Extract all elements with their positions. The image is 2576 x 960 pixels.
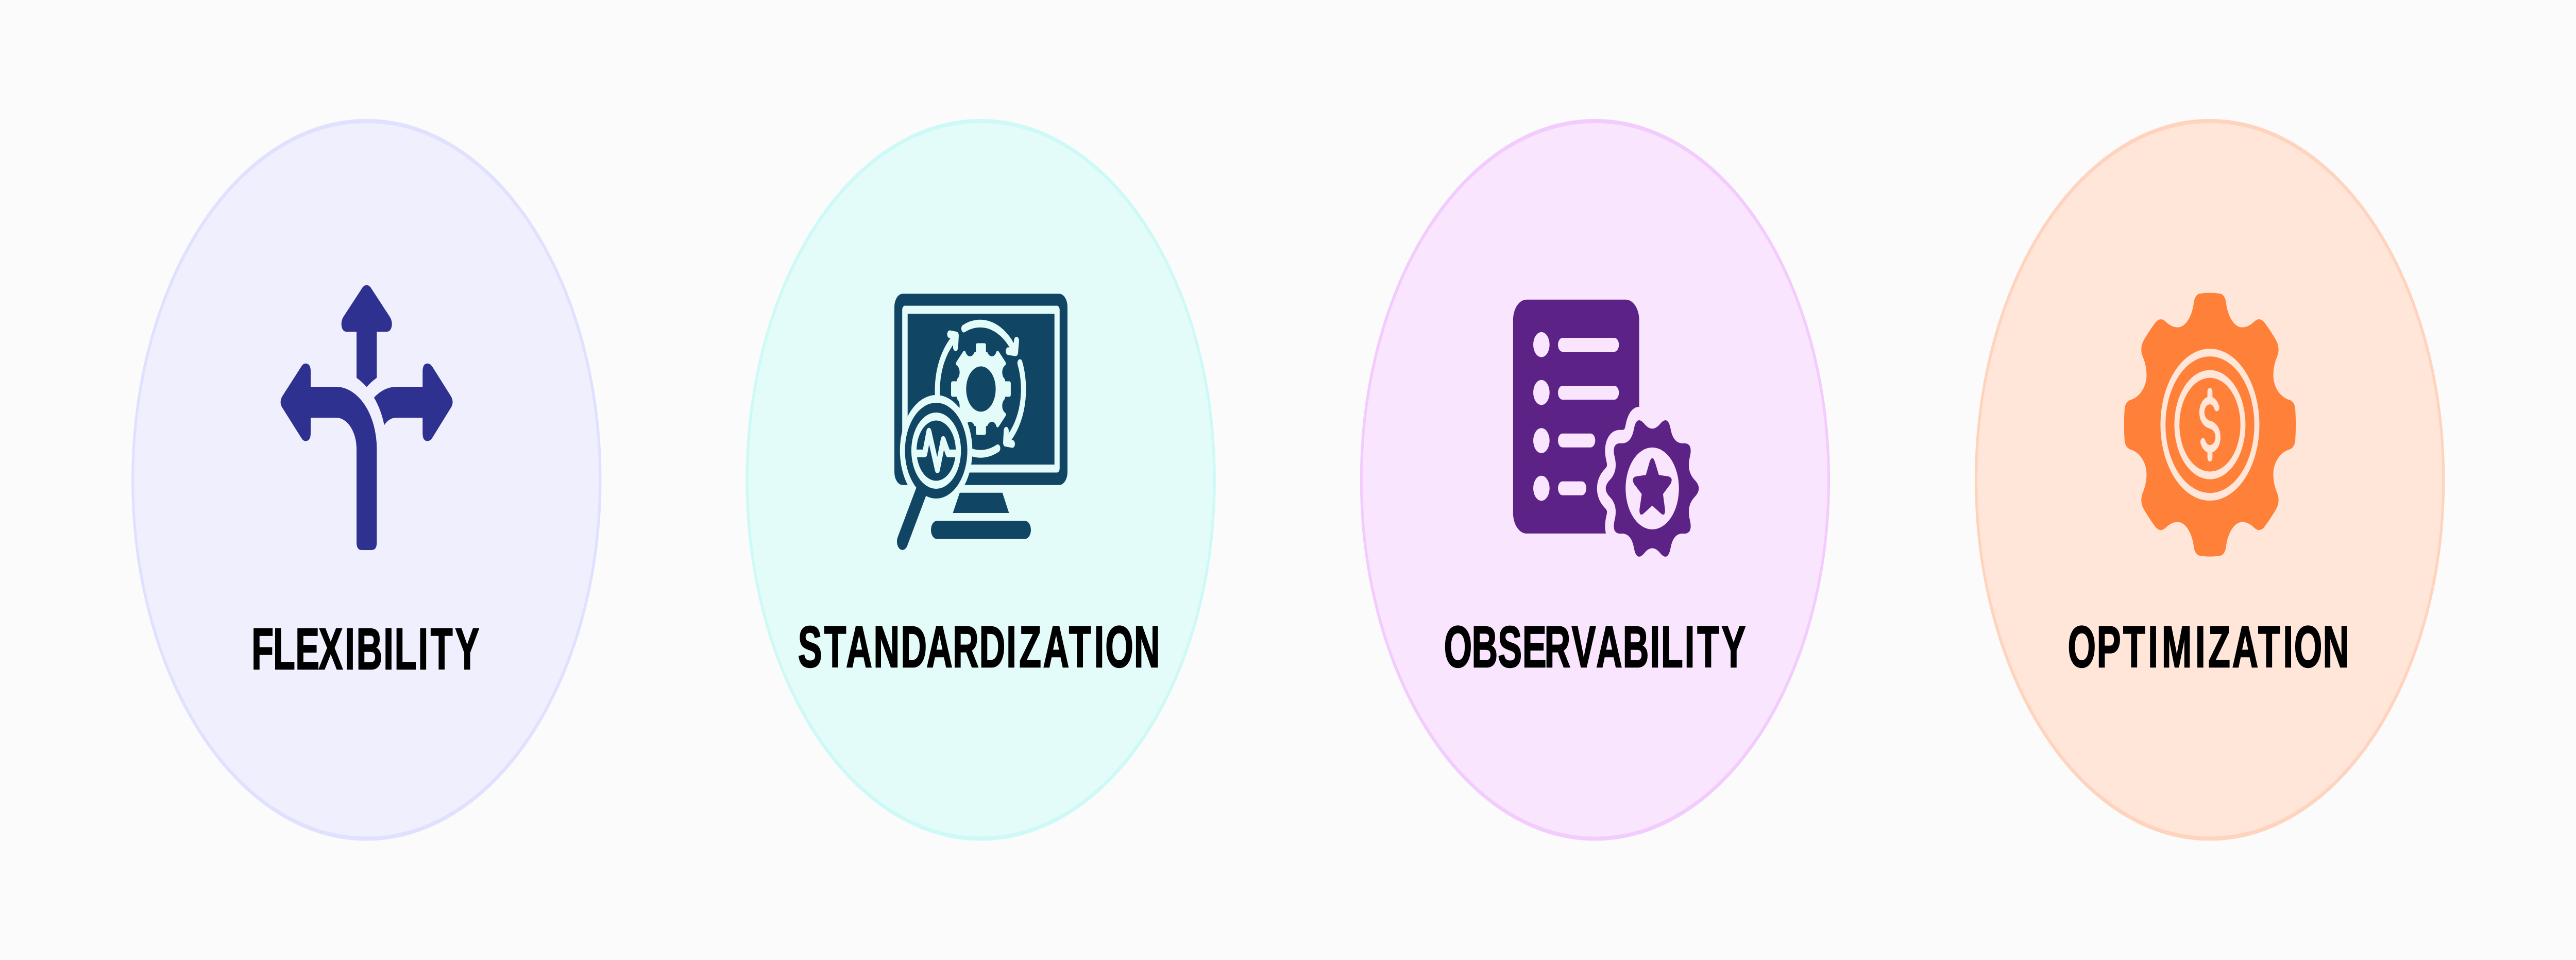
document xyxy=(1513,300,1639,534)
circular arrows xyxy=(937,323,1024,454)
label: STANDARDIZATION: STANDARDIZATION xyxy=(798,614,1160,679)
label: OPTIMIZATION: OPTIMIZATION xyxy=(2068,614,2349,679)
circle: flexibility background xyxy=(133,121,600,838)
monitor xyxy=(894,294,1067,539)
circle: optimization background xyxy=(1976,121,2444,838)
panel: standardization xyxy=(747,121,1214,838)
label: OBSERVABILITY: OBSERVABILITY xyxy=(1444,614,1745,679)
gear body xyxy=(2124,293,2296,557)
panel: observability xyxy=(1361,121,1829,838)
icon: monitor with gear and magnifier xyxy=(894,294,1067,541)
panel: optimization xyxy=(1976,121,2444,838)
gear xyxy=(950,341,1012,437)
circle: standardization background xyxy=(747,121,1214,838)
circle: observability background xyxy=(1361,121,1829,838)
panel: flexibility xyxy=(133,121,600,838)
magnifier xyxy=(900,395,972,541)
icon: checklist with badge xyxy=(1513,300,1699,557)
coin rings and dollar sign xyxy=(2163,353,2257,497)
label: FLEXIBILITY: FLEXIBILITY xyxy=(251,616,479,681)
badge with star xyxy=(1606,420,1699,557)
icon: gear with dollar coin xyxy=(2124,293,2296,557)
icon: three-way arrows xyxy=(281,285,453,550)
